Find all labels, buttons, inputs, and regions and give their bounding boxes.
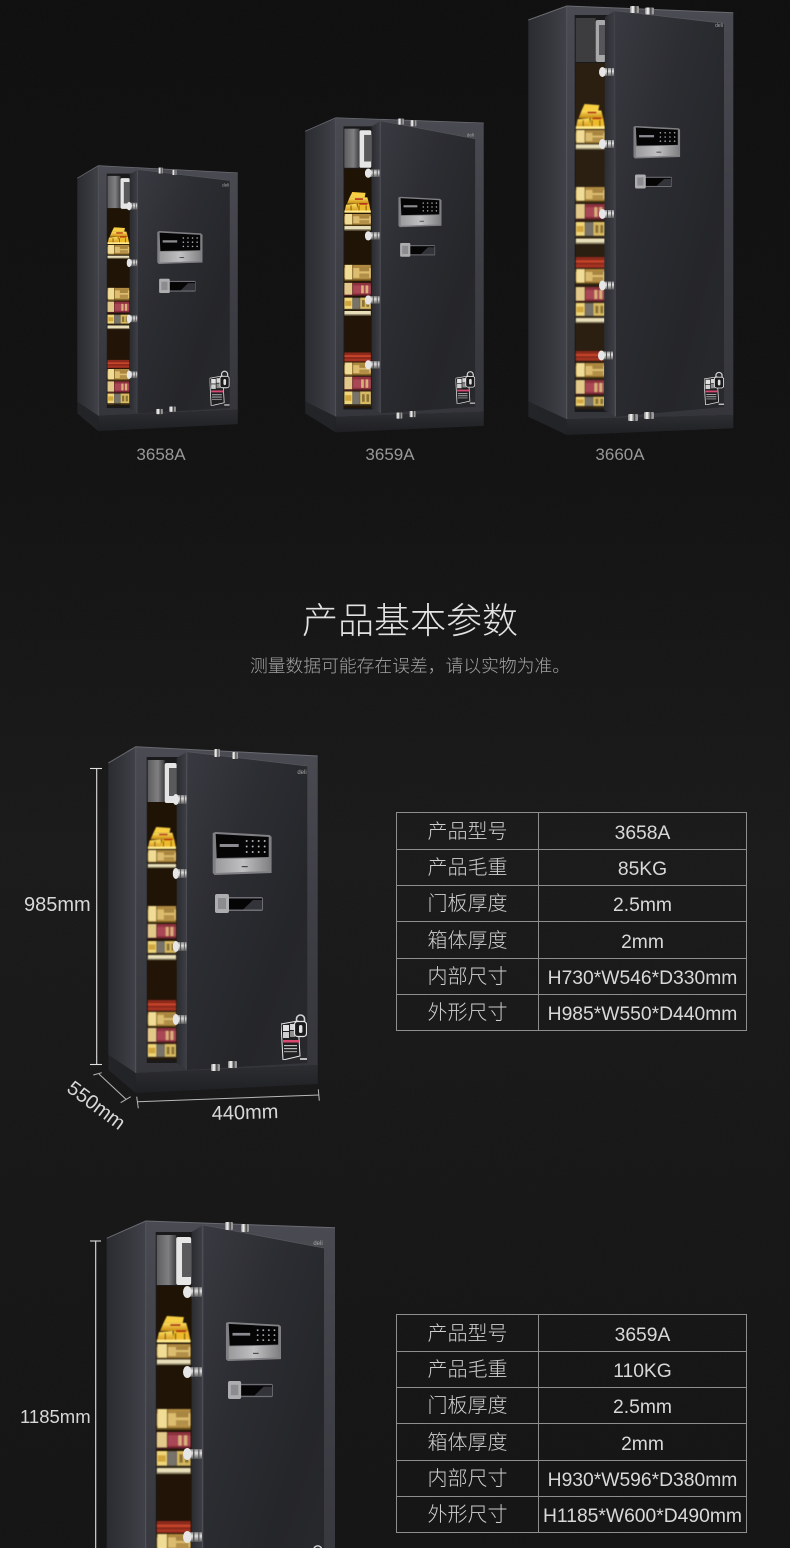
- locking bolts: [183, 1286, 202, 1543]
- spec table: 3659A: 产品型号: [428, 1316, 508, 1346]
- spec table: 3658A: [396, 812, 747, 1031]
- spec table: 3659A: 2.5mm: [613, 1397, 672, 1418]
- electronic keypad: [226, 1322, 281, 1361]
- caption: 3658A: 3658A: [136, 445, 186, 464]
- interior compartment: [147, 757, 179, 1063]
- spec table: 3658A: 3658A: [615, 822, 670, 844]
- interior compartment: [575, 15, 608, 412]
- product photo: 3659A safe, small: [305, 118, 484, 432]
- product photo: 3659A safe, large, cropped by the page bottom: [107, 1221, 335, 1548]
- product photo: 3658A safe, small: [77, 166, 238, 431]
- width dimension line: 440mm: [137, 1089, 319, 1108]
- safe body: side panel and plinth: [528, 6, 733, 435]
- hinges: [628, 6, 654, 421]
- interior compartment: [156, 1232, 193, 1548]
- height dimension line: 985mm: [90, 768, 102, 1064]
- spec table: 3659A: 箱体厚度: [428, 1426, 508, 1454]
- spec table: 3658A: 外形尺寸: [428, 996, 508, 1025]
- spec table: 3659A: 内部尺寸: [428, 1462, 508, 1491]
- subtitle note: 测量数据可能存在误差，请以实物为准。: [250, 652, 570, 678]
- spec table: 3659A: 外形尺寸: [428, 1498, 508, 1527]
- label: 440mm: 440mm: [211, 1101, 279, 1125]
- locking bolts: [173, 794, 187, 1025]
- door: [604, 11, 724, 417]
- spec table: 3658A: 2mm: [621, 932, 664, 952]
- electronic keypad: [213, 832, 272, 875]
- label: 985mm: 985mm: [24, 894, 91, 916]
- door: [192, 1225, 324, 1548]
- product photo: 3658A safe, large, with door ajar: [108, 747, 318, 1093]
- label: 550mm: 550mm: [63, 1077, 129, 1135]
- safety sticker: [299, 1546, 324, 1548]
- hinges: [223, 1222, 249, 1548]
- spec table: 3659A: H930*W596*D380mm: [548, 1470, 737, 1491]
- safe body: side panel and plinth: [107, 1221, 335, 1548]
- brand mark: deli: [297, 770, 307, 776]
- spec table: 3658A: 2.5mm: [613, 895, 672, 916]
- spec table: 3658A: 产品型号: [428, 814, 508, 844]
- spec table: 3658A: 产品毛重: [428, 851, 508, 880]
- safety sticker: [281, 1015, 307, 1060]
- product photo: 3660A safe: [528, 6, 733, 435]
- title: 产品基本参数: [302, 592, 518, 644]
- door handle: [215, 894, 263, 913]
- door handle: [635, 174, 672, 188]
- spec table: 3658A: H985*W550*D440mm: [548, 1004, 737, 1025]
- locking bolts: [598, 67, 614, 360]
- spec table: 3659A: [396, 1314, 747, 1533]
- brand mark: deli: [313, 1241, 323, 1247]
- spec table: 3659A: 产品毛重: [428, 1353, 508, 1382]
- spec table: 3658A: 门板厚度: [428, 887, 508, 916]
- depth dimension line: 550mm: [93, 1073, 131, 1103]
- spec table: 3658A: 箱体厚度: [428, 924, 508, 952]
- safe body: side panel and plinth: [108, 747, 318, 1093]
- door handle: [228, 1381, 273, 1399]
- spec table: 3659A: H1185*W600*D490mm: [543, 1506, 742, 1527]
- spec table: 3659A: 110KG: [613, 1361, 672, 1382]
- spec table: 3659A: 门板厚度: [428, 1389, 508, 1418]
- spec table: 3658A: 内部尺寸: [428, 960, 508, 989]
- hinges: [211, 749, 238, 1071]
- brand mark: deli: [715, 23, 723, 29]
- safety sticker: [704, 372, 724, 405]
- spec table: 3659A: 2mm: [621, 1434, 664, 1454]
- electronic keypad: [633, 126, 680, 158]
- caption: 3659A: 3659A: [365, 445, 415, 464]
- height dimension line: 1185mm: [90, 1241, 101, 1548]
- door: [177, 752, 307, 1070]
- spec table: 3658A: H730*W546*D330mm: [548, 968, 737, 989]
- spec table: 3658A: 85KG: [618, 859, 667, 880]
- spec table: 3659A: 3659A: [615, 1324, 670, 1346]
- label: 1185mm: 1185mm: [20, 1406, 91, 1427]
- caption: 3660A: 3660A: [595, 445, 645, 464]
